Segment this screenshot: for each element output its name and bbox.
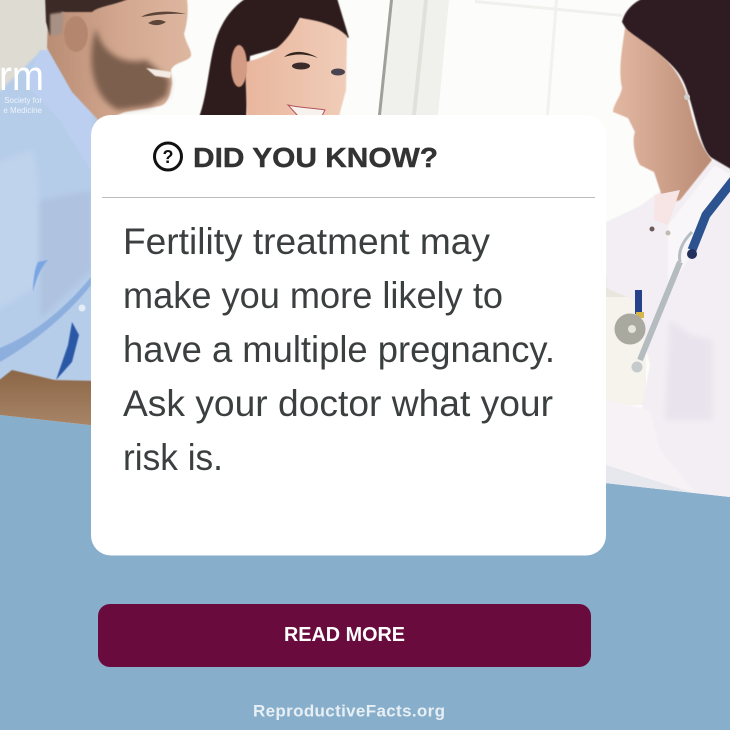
- man: shirt: [0, 52, 100, 390]
- woman: face: [245, 18, 347, 120]
- stethoscope: [614, 178, 730, 372]
- woman: ear: [231, 45, 247, 87]
- panel: did you know card: [91, 115, 606, 556]
- logo: partially cropped society mark: [0, 52, 44, 115]
- text block: fertility message: risk is.: [123, 437, 223, 478]
- man: arm: [0, 369, 91, 426]
- icon: question mark circle: ?: [162, 147, 174, 167]
- woman: hair: [198, 0, 349, 120]
- doctor: white coat details: [606, 190, 710, 492]
- man: ear: [64, 16, 88, 52]
- heading: DID YOU KNOW?: [193, 142, 438, 173]
- text block: fertility message: [123, 221, 555, 478]
- text block: fertility message: make you more likely to: [123, 275, 503, 316]
- doctor: hair: [622, 0, 730, 180]
- logo: partially cropped society mark: Society for: [4, 96, 42, 105]
- doctor: face and neck: [613, 28, 712, 205]
- man: beard: [91, 28, 170, 110]
- text block: fertility message: Ask your doctor what your: [123, 383, 553, 424]
- footer website: ReproductiveFacts.org: [253, 702, 445, 720]
- icon: question mark circle: [154, 143, 182, 170]
- button: read more: [98, 604, 591, 667]
- woman: eyes and smile: [284, 52, 345, 116]
- logo: partially cropped society mark: e Medicine: [3, 106, 43, 115]
- photo: patient couple and doctor in clinic: [0, 0, 730, 520]
- logo: partially cropped society mark: rm: [0, 52, 44, 99]
- man: neck and face: [47, 0, 191, 122]
- button: read more: READ MORE: [284, 624, 405, 646]
- man: smile and eye: [141, 12, 186, 78]
- text block: fertility message: Fertility treatment may: [123, 221, 490, 262]
- doctor: neck and coat base: [606, 160, 730, 520]
- text block: fertility message: have a multiple pregnancy.: [123, 329, 555, 370]
- photo background: bright clinic room: [0, 0, 730, 500]
- man: hair: [45, 0, 136, 36]
